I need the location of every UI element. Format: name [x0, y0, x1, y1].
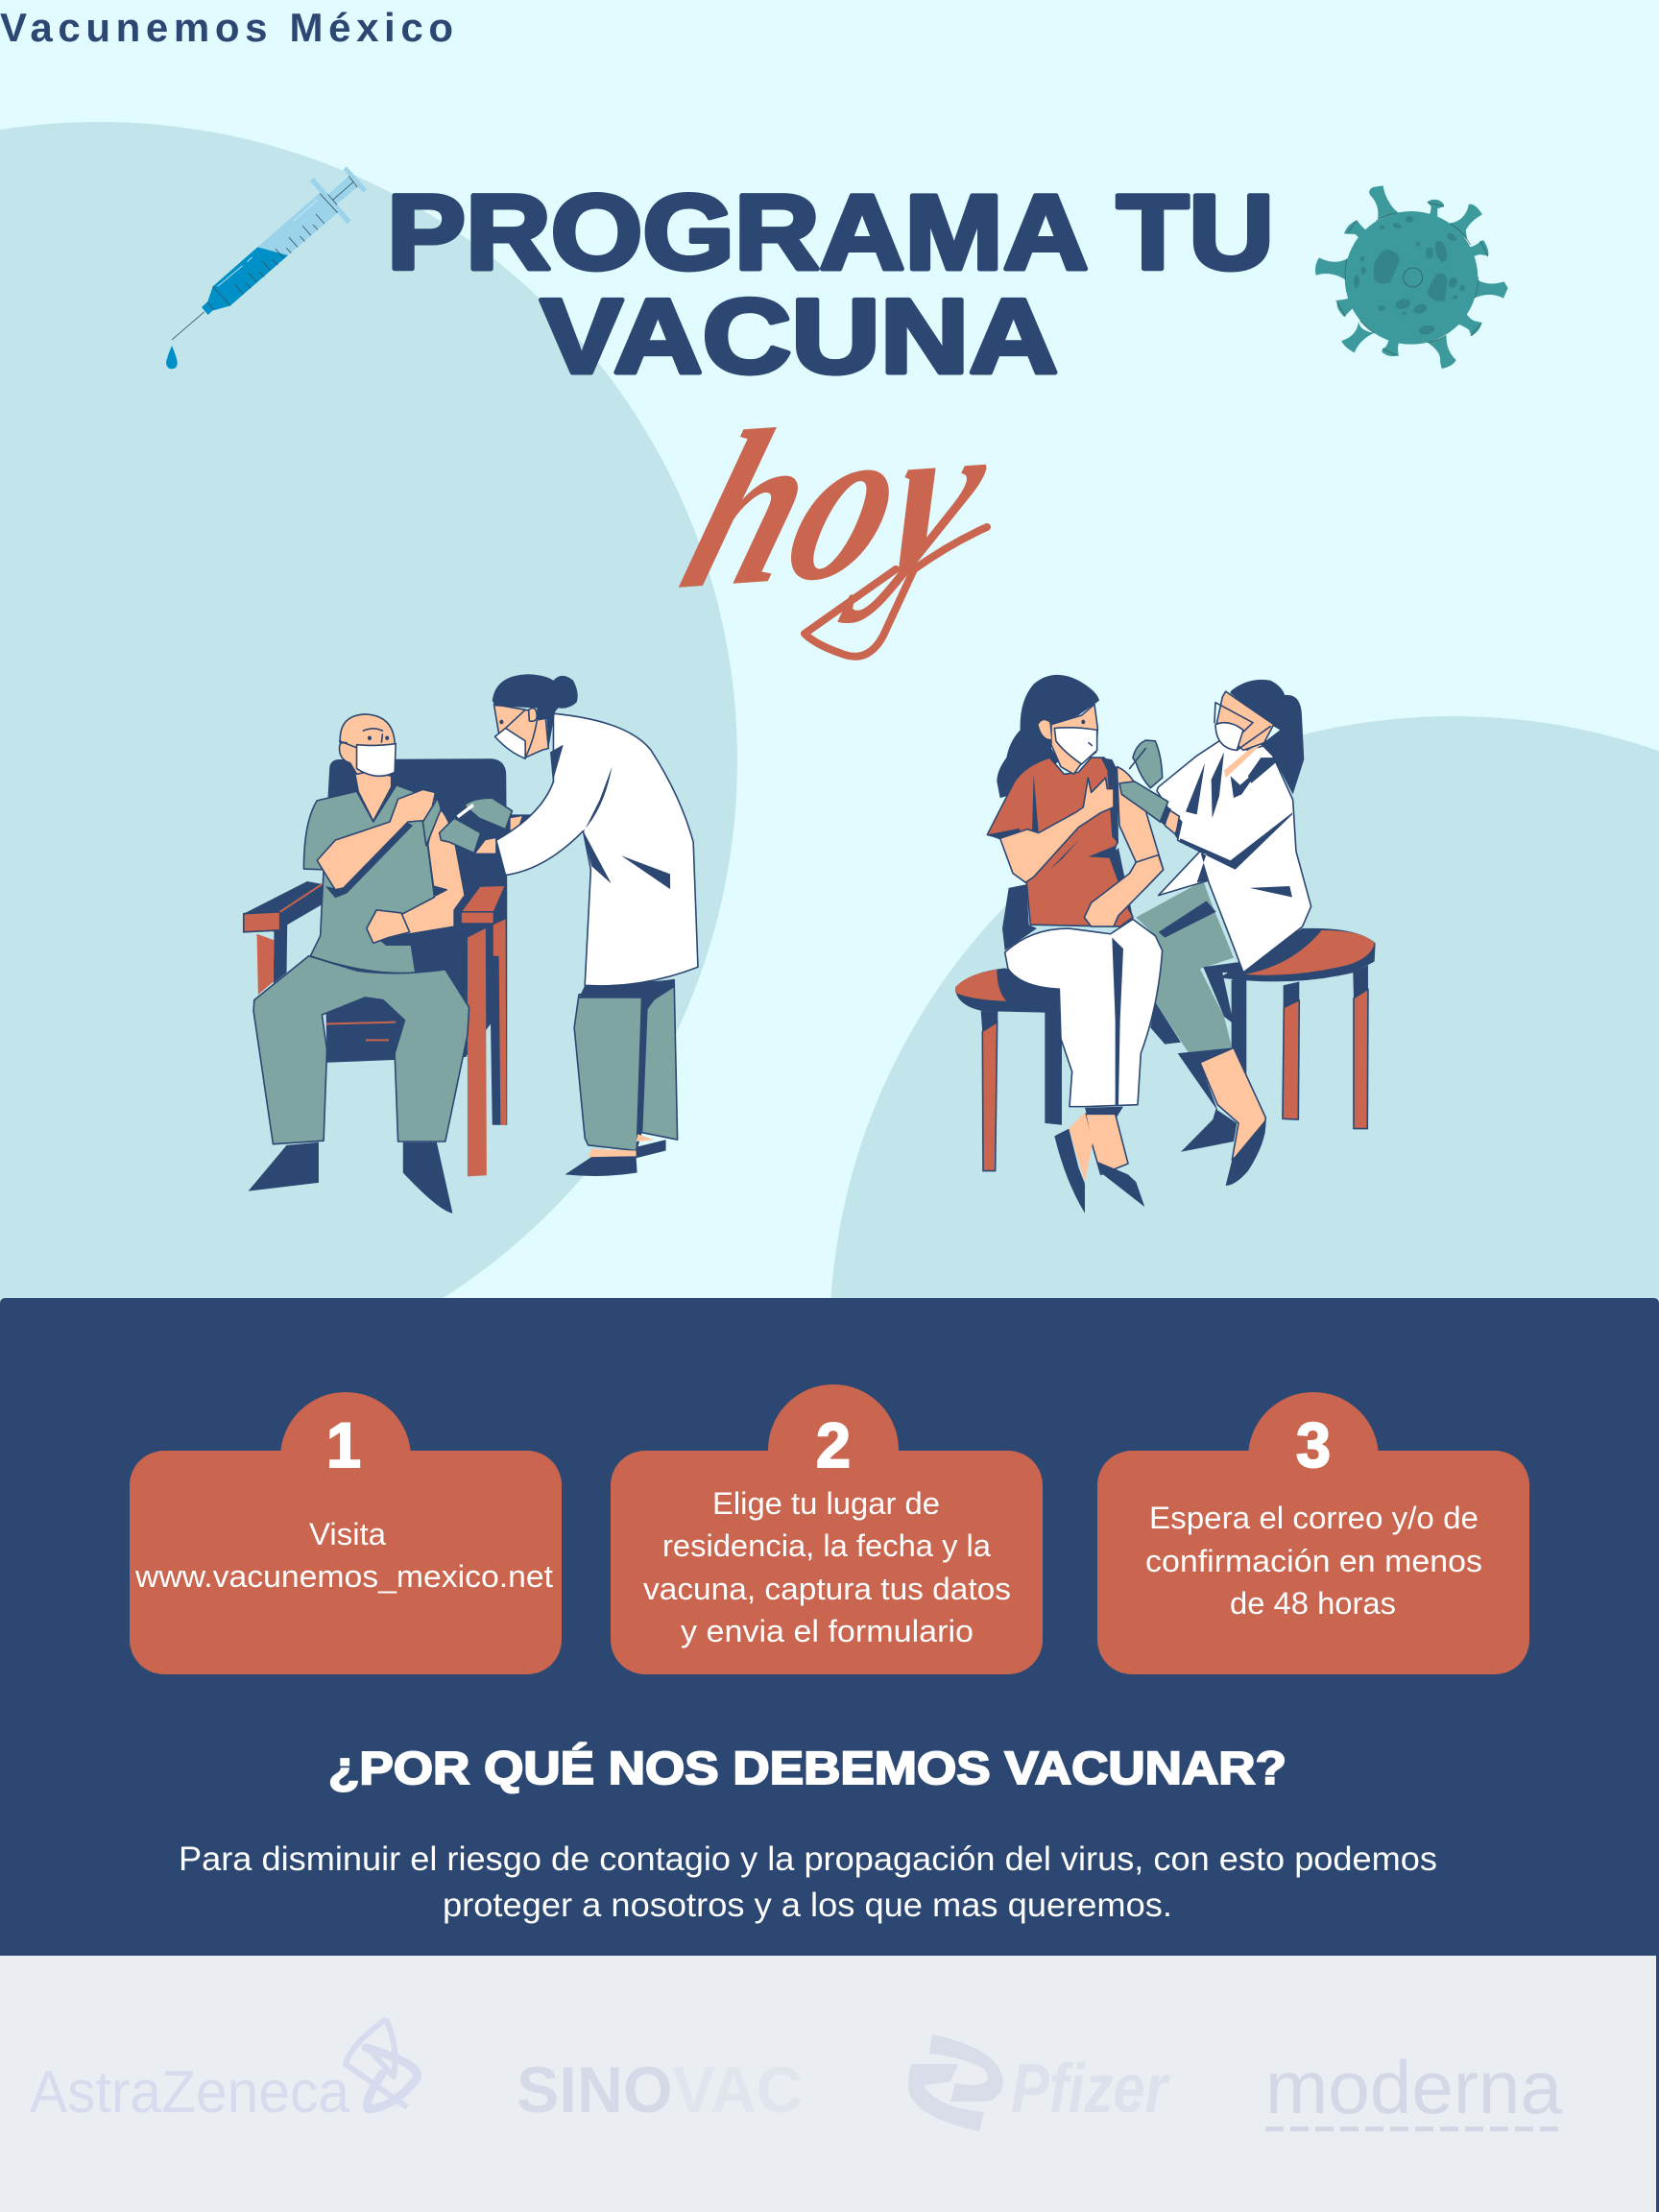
nurse arm and gloves [502, 814, 537, 874]
patient neck and head [354, 769, 392, 821]
step card 2: Elige tu lugar de [712, 1486, 940, 1521]
text block: reason [179, 1840, 1437, 1924]
nurse pants [574, 980, 678, 1151]
step card 2 [611, 1384, 1043, 1674]
patient forearm and hand on belly [1084, 854, 1164, 926]
patient mask [357, 744, 396, 776]
heading: why vaccinate: ¿POR QUÉ NOS DEBEMOS VACUNAR? [328, 1743, 1286, 1794]
logo: AstraZeneca [30, 2019, 418, 2126]
logo: Pfizer [908, 2034, 1170, 2131]
patient upper arm [367, 807, 465, 938]
doctor head [1214, 680, 1304, 794]
doctor hands [1130, 740, 1183, 840]
illustration: man being vaccinated by nurse [244, 674, 698, 1214]
panel: steps [0, 1298, 1659, 1956]
step card 3: Espera el correo y/o de [1149, 1501, 1479, 1535]
script word hoy: hoy [659, 368, 1020, 637]
doctor pants and leg [1136, 880, 1265, 1186]
step card 3: de 48 horas [1230, 1586, 1396, 1621]
step card 1 [130, 1392, 562, 1674]
nurse coat [496, 713, 698, 986]
panel: vaccine logos [0, 1956, 1656, 2212]
patient upper arm [1117, 767, 1164, 888]
brand name: Vacunemos México [0, 5, 453, 50]
icon: virus [1315, 185, 1508, 369]
patient shoes [249, 1142, 452, 1214]
patient shirt [987, 757, 1133, 926]
patient shirt [303, 785, 436, 974]
patient pants [1005, 919, 1163, 1107]
doctor coat [1157, 741, 1311, 973]
patient hair [997, 675, 1099, 798]
step card 3: 3 [1296, 1409, 1331, 1480]
stool left [955, 968, 1062, 1171]
step card 2: vacuna, captura tus datos [643, 1572, 1011, 1606]
patient face [1039, 705, 1097, 774]
title: PROGRAMA TU [387, 174, 1274, 292]
patient hand [367, 910, 410, 943]
title [387, 174, 1274, 396]
step card 1: Visita [309, 1517, 386, 1551]
step card 1: www.vacunemos_mexico.net [134, 1559, 553, 1594]
text block: reason: proteger a nosotros y a los que mas queremos. [443, 1887, 1172, 1924]
step card 2: residencia, la fecha y la [662, 1528, 991, 1563]
patient arm left [1000, 778, 1114, 882]
nurse shoes [589, 1134, 654, 1158]
step card 1: 1 [326, 1409, 361, 1480]
chair [244, 758, 507, 1176]
icon: syringe [166, 166, 367, 369]
background circle left [0, 122, 737, 1399]
patient body shadow [1002, 884, 1037, 950]
logo: Sinovac: SINOVAC [517, 2054, 803, 2127]
step card 2: y envia el formulario [681, 1614, 974, 1648]
step card 3 [1097, 1392, 1529, 1674]
patient pants [253, 956, 469, 1144]
title: VACUNA [541, 277, 1058, 396]
logo: Moderna: moderna [1265, 2045, 1563, 2129]
patient forearm [325, 822, 413, 898]
step card 3: confirmación en menos [1145, 1544, 1482, 1578]
step card 2: 2 [816, 1409, 851, 1480]
background circle right [830, 716, 1659, 1964]
logo: AstraZeneca: AstraZeneca [30, 2059, 349, 2126]
patient legs and shoes [1054, 1107, 1144, 1214]
illustration: woman being vaccinated by doctor [955, 675, 1376, 1214]
doctor lower glove [1119, 781, 1168, 822]
logo: Pfizer: Pfizer [1011, 2051, 1170, 2128]
stool right [1222, 928, 1376, 1129]
text block: reason: Para disminuir el riesgo de contagio y la propagación del virus, con esto podemos [179, 1840, 1437, 1878]
nurse head [493, 674, 578, 758]
